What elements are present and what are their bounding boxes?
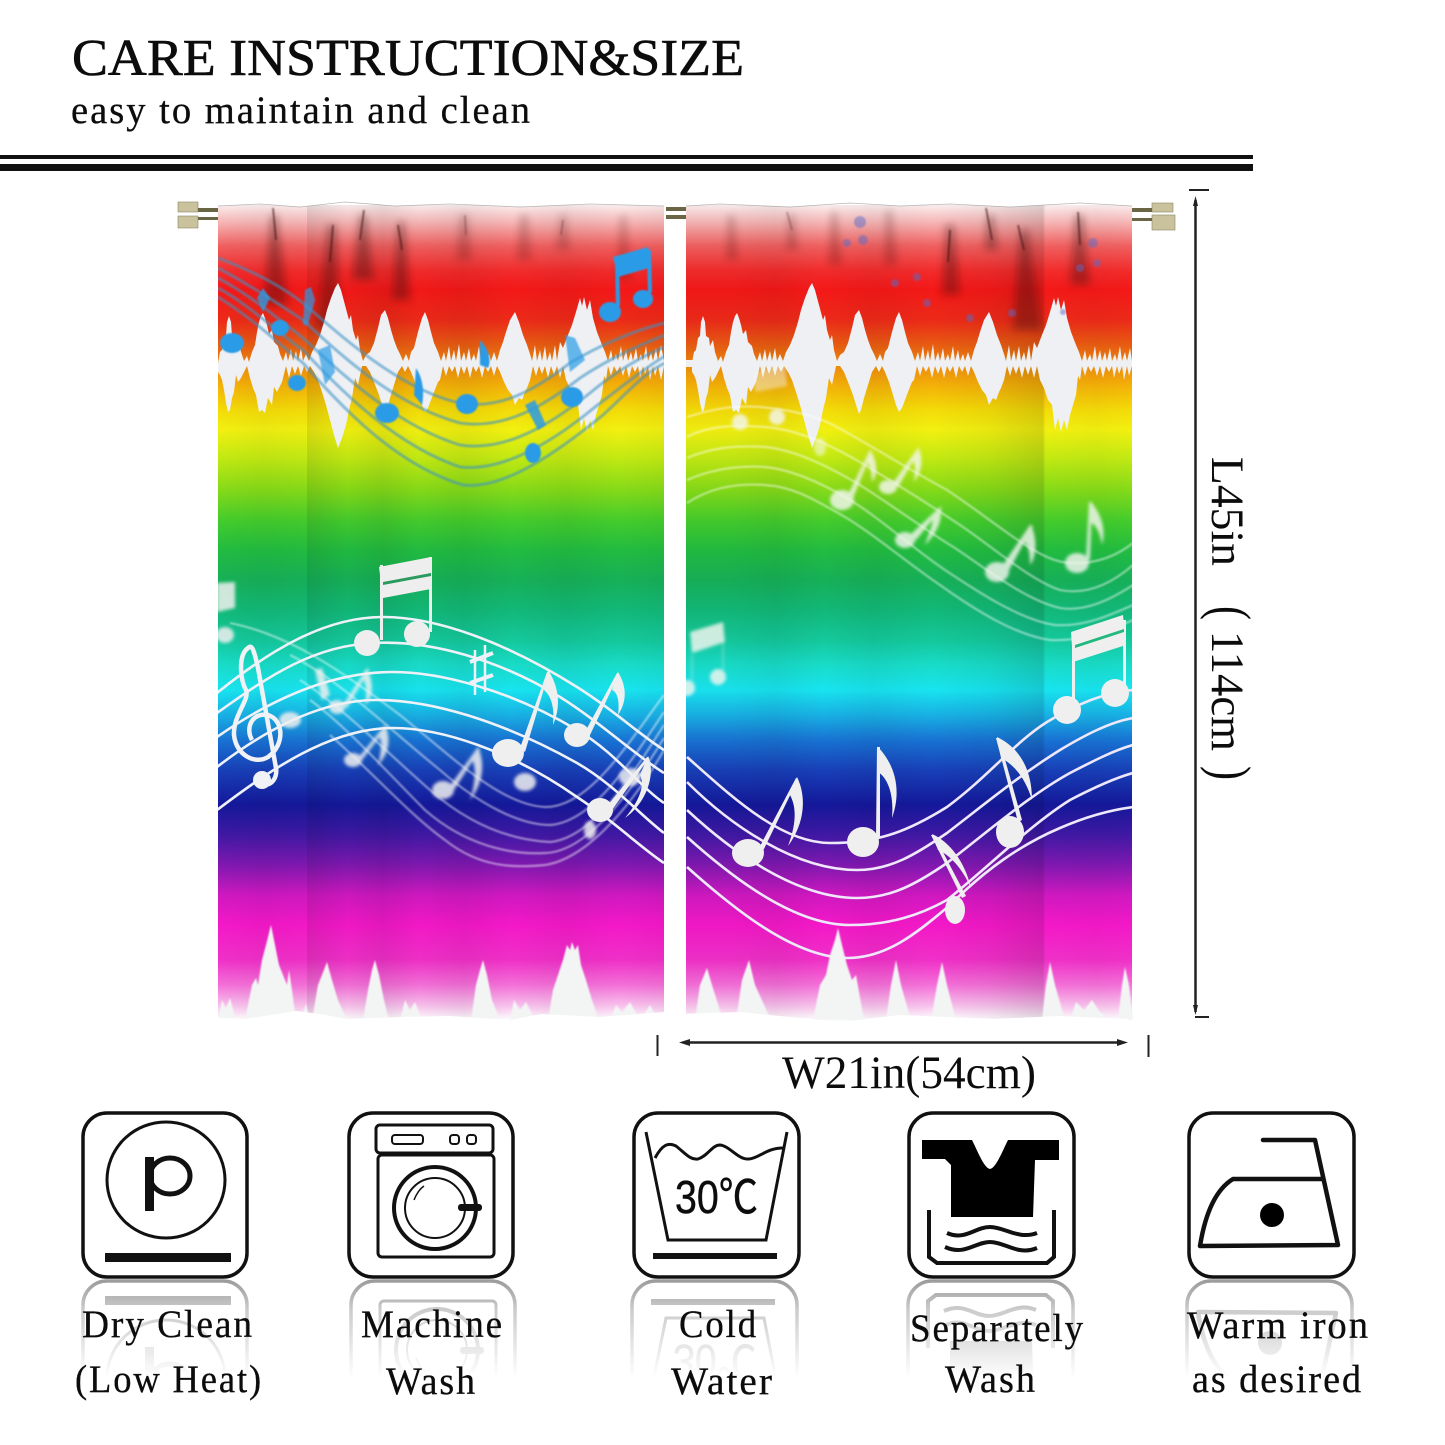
bottom white spikes — [218, 925, 1133, 1020]
icon: white notes — [492, 670, 651, 822]
length dimension arrow — [1189, 190, 1209, 1017]
blue music notes — [220, 247, 653, 463]
faint music staff — [230, 623, 664, 866]
label: cold water — [671, 1303, 774, 1403]
icon: treble clef — [234, 647, 280, 789]
label: cold water: Water — [671, 1360, 774, 1403]
label: warm iron: Warm iron — [1187, 1304, 1370, 1347]
faint blue notes — [843, 216, 1101, 322]
label: machine wash — [361, 1303, 504, 1403]
length label: 114cm — [1201, 631, 1253, 751]
icon: washing machine — [349, 1113, 513, 1277]
label: warm iron — [1187, 1304, 1370, 1401]
faint upper music staff — [687, 407, 1133, 640]
width label: W21in(54cm) — [782, 1047, 1036, 1099]
icon: wash basin 30C — [634, 1113, 799, 1277]
curtain hem edges — [210, 198, 1140, 1040]
icon reflections — [81, 1279, 1354, 1368]
label: cold water: Cold — [679, 1303, 758, 1346]
label: separately wash — [910, 1307, 1085, 1401]
icon: iron — [1189, 1113, 1354, 1277]
curtain rod and finials — [178, 202, 1175, 230]
white music staff — [687, 690, 1133, 958]
label: dry clean: (Low Heat) — [75, 1358, 263, 1401]
label: warm iron: as desired — [1192, 1358, 1363, 1401]
panel: right curtain — [679, 205, 1138, 1021]
top wrinkles — [264, 208, 632, 330]
icon: sharp sign — [470, 645, 493, 695]
sound wave — [218, 283, 664, 448]
top wrinkles — [726, 208, 1090, 330]
label: separately wash: Separately — [910, 1307, 1085, 1350]
length label: L45in — [1201, 457, 1253, 566]
icon: separate wash shirt — [909, 1113, 1074, 1277]
hem stitching line — [218, 202, 1132, 207]
label: separately wash: Wash — [945, 1358, 1037, 1401]
title: CARE INSTRUCTION&SIZE — [72, 30, 744, 87]
icon: beamed notes — [354, 557, 432, 656]
subtitle: easy to maintain and clean — [71, 89, 532, 132]
icon: white notes — [732, 615, 1129, 924]
length label — [1199, 457, 1261, 780]
icon: wash basin 30C: 30℃ — [675, 1171, 758, 1223]
white music staff — [217, 617, 664, 863]
blue music staff — [218, 258, 665, 485]
panel: left curtain — [216, 205, 665, 1021]
label: dry clean — [75, 1303, 263, 1401]
icon: dry clean — [83, 1113, 247, 1277]
icon: blurred upper notes — [679, 364, 1104, 696]
label: machine wash: Wash — [386, 1360, 477, 1403]
width dimension arrow — [658, 1035, 1148, 1057]
length label: ) — [1199, 766, 1261, 780]
length label: ( — [1199, 606, 1261, 620]
sound wave — [686, 283, 1138, 448]
icon: blurred notes — [216, 582, 641, 839]
label: dry clean: Dry Clean — [82, 1303, 254, 1346]
label: machine wash: Machine — [361, 1303, 504, 1346]
